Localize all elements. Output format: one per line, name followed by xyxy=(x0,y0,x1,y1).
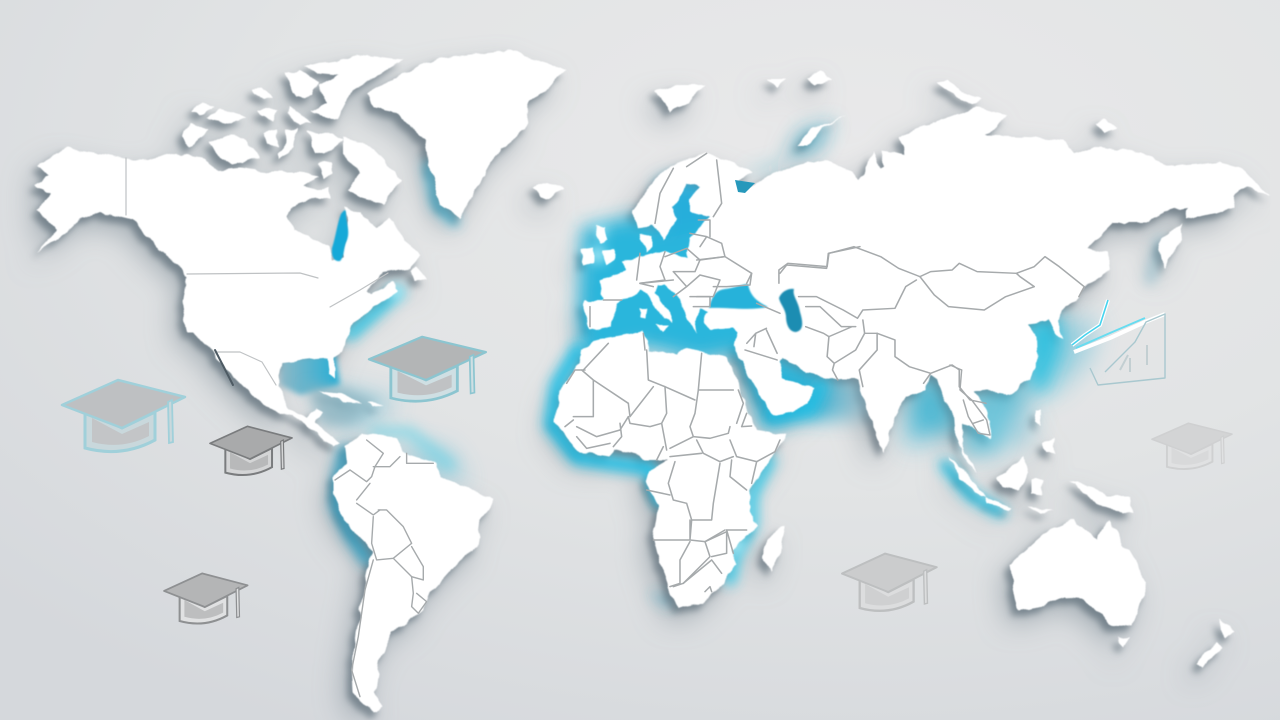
islands: Europe xyxy=(582,226,669,332)
ghost Japan outline xyxy=(1072,300,1165,385)
borders: Africa xyxy=(565,333,780,592)
continent: Eurasia xyxy=(583,107,1270,472)
country borders xyxy=(126,153,1084,697)
cap: grey lower left xyxy=(164,573,248,624)
cap: dark outlined xyxy=(210,426,292,475)
borders: Asia xyxy=(745,247,1084,403)
borders: Europe xyxy=(590,153,860,327)
island: Sakhalin xyxy=(1159,223,1182,267)
island: Newfoundland xyxy=(410,267,427,282)
islands: New Zealand xyxy=(1197,619,1234,667)
islands: Canadian Arctic xyxy=(180,55,403,205)
cyan coastal glow xyxy=(280,120,1160,605)
Caspian Sea xyxy=(779,289,802,332)
borders: Indochina xyxy=(950,365,990,435)
continent: Australia xyxy=(1010,520,1147,627)
island: Greenland xyxy=(365,50,567,218)
borders: South America xyxy=(335,440,433,697)
islands: Arctic Ocean xyxy=(655,72,1116,147)
island: Tasmania xyxy=(1116,636,1129,648)
Black Sea xyxy=(709,284,768,309)
James Bay xyxy=(332,210,348,261)
cap: blue outlined top xyxy=(369,337,486,401)
borders: North America xyxy=(126,158,388,385)
islands: Caribbean xyxy=(318,391,384,408)
island: Madagascar xyxy=(763,525,785,572)
continent: Africa xyxy=(555,330,788,610)
island: Iceland xyxy=(532,181,563,198)
continent: South America xyxy=(333,433,493,712)
inland seas xyxy=(332,180,802,332)
continent: North America xyxy=(33,148,420,447)
cap: pale right xyxy=(1152,423,1232,469)
White Sea xyxy=(735,180,755,193)
islands: Southeast Asia xyxy=(950,409,1133,514)
cap: pale centre xyxy=(842,554,937,611)
cap: blue outlined left xyxy=(62,380,185,452)
